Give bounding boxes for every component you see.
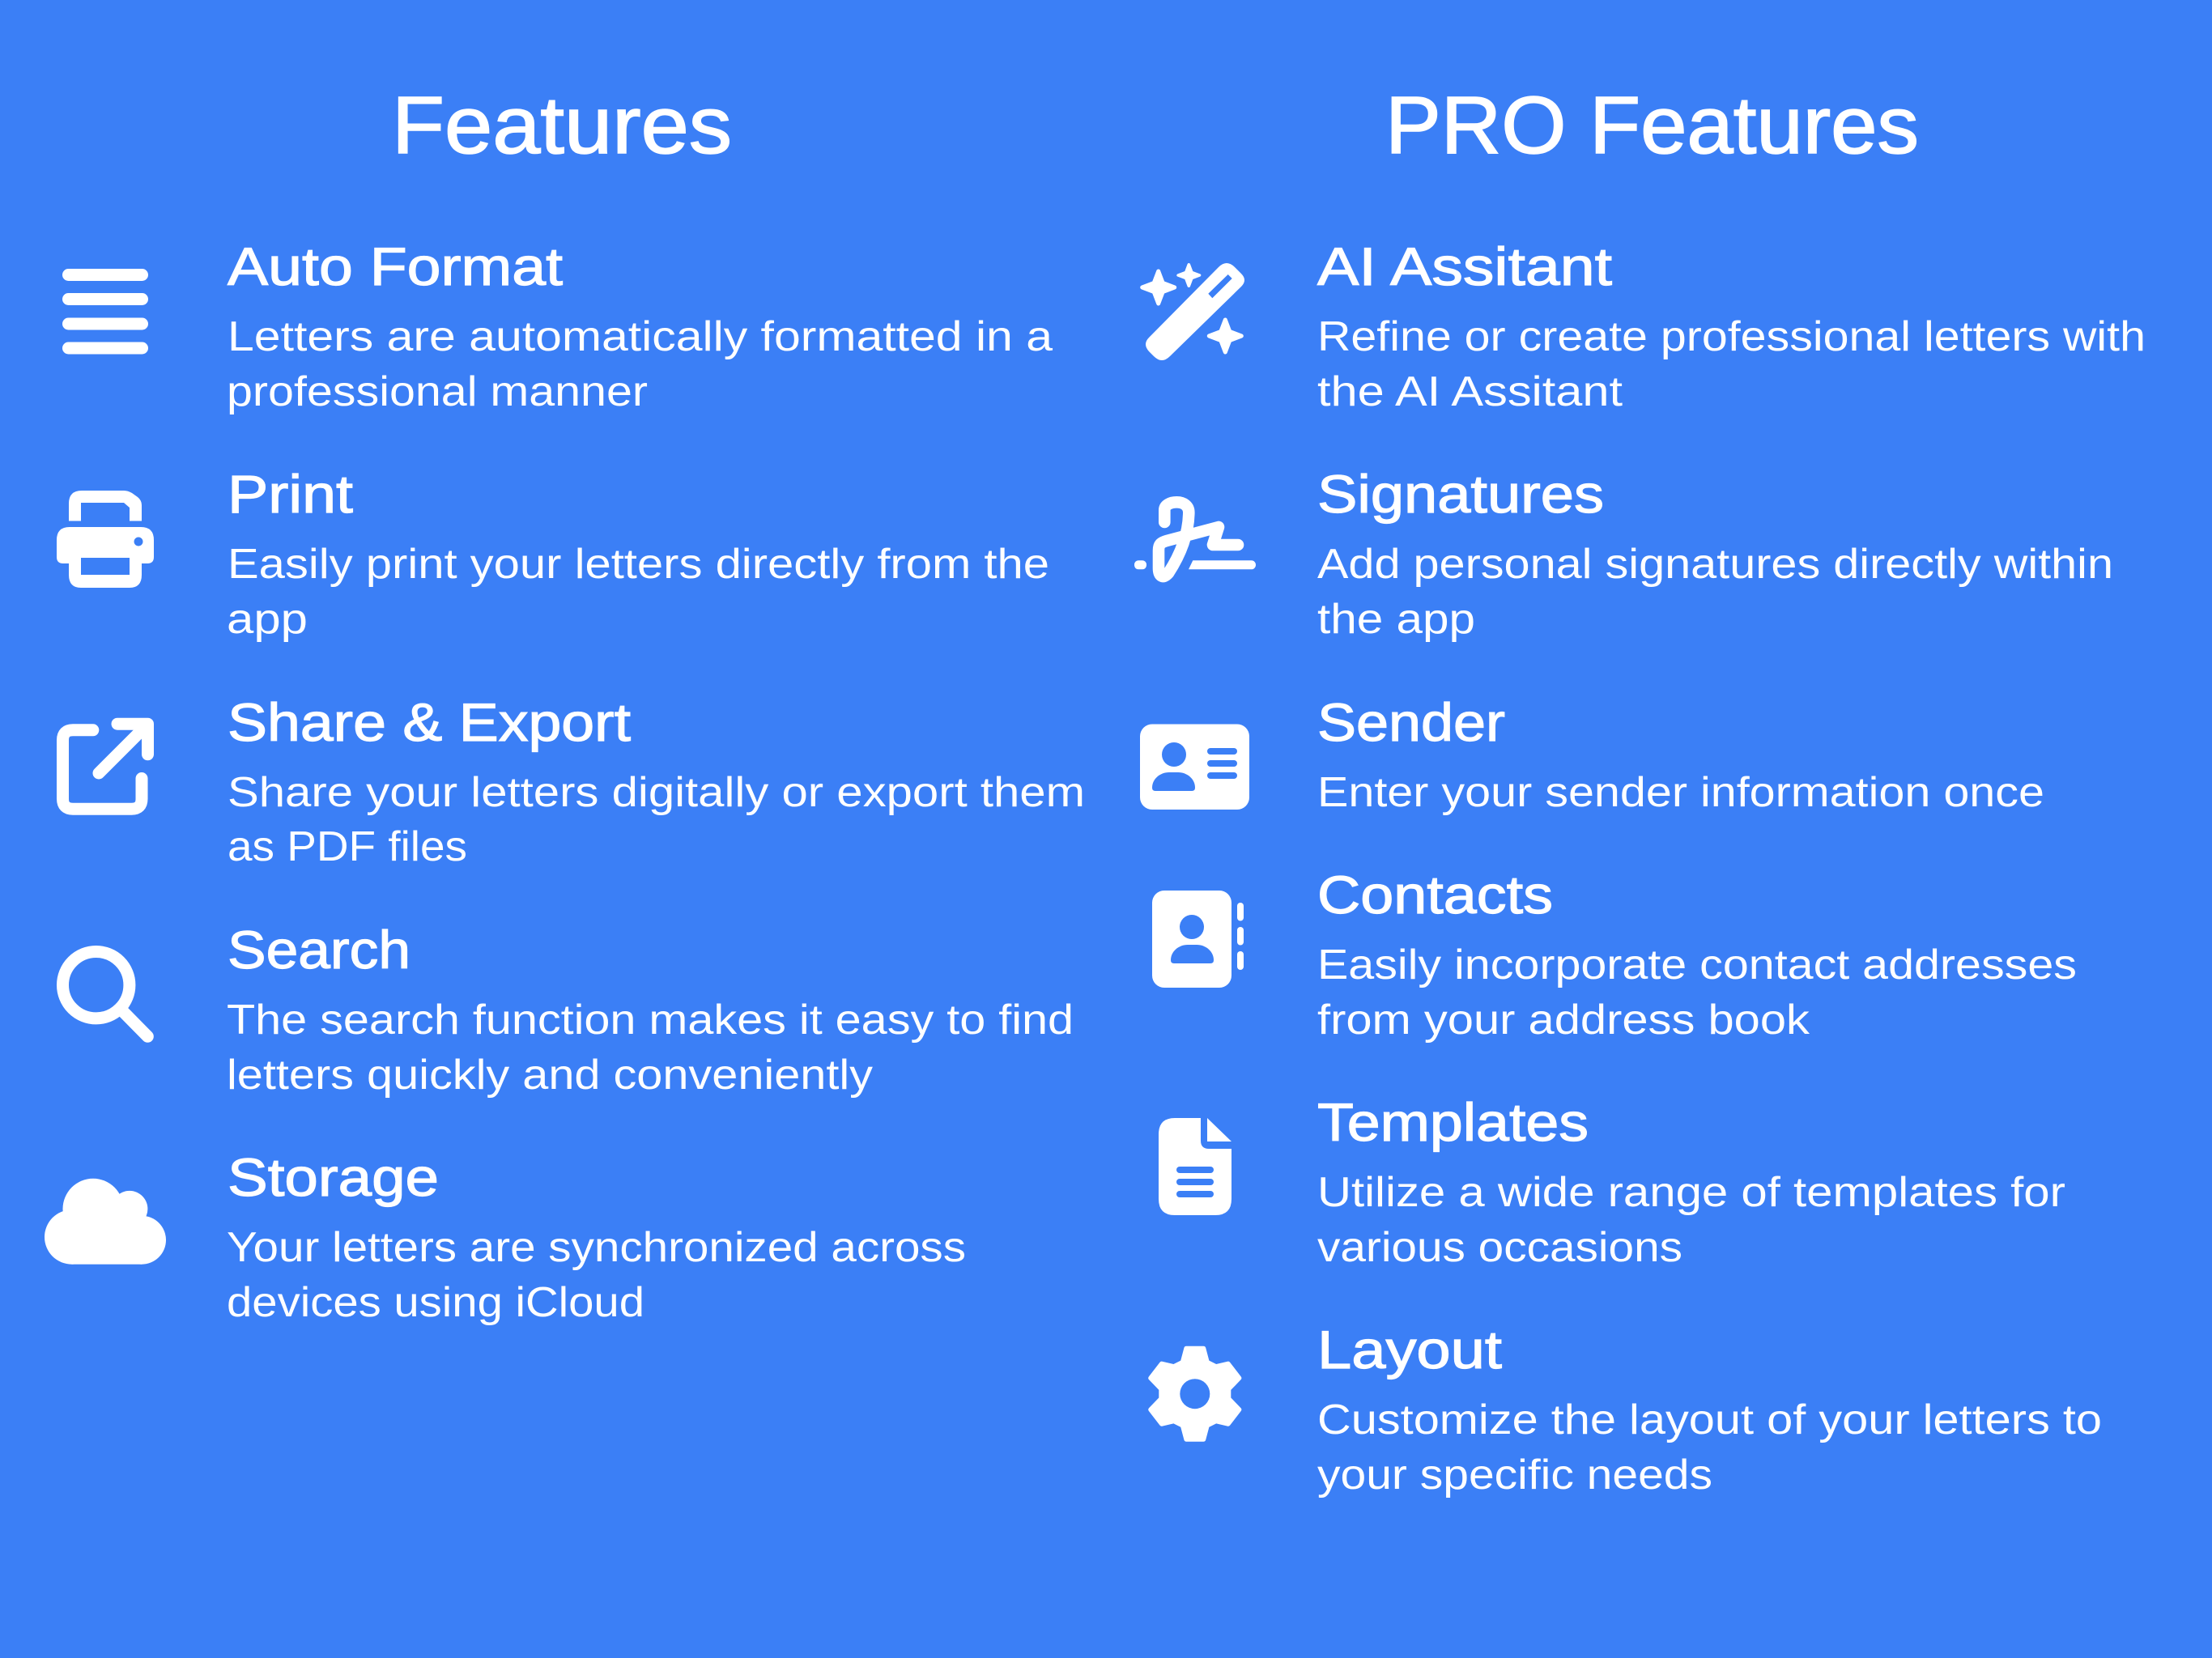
title: Templates: Templates <box>1317 1092 1589 1152</box>
feature: Share & Export <box>63 692 1085 870</box>
description: Auto Format: Letters are automatically formatted in a <box>228 313 1053 360</box>
icon: contact card <box>1140 724 1249 810</box>
description: AI Assitant <box>1317 313 2146 415</box>
icon: printer <box>57 491 154 588</box>
description: Storage: devices using iCloud <box>227 1279 644 1326</box>
description: Print: app <box>227 596 308 643</box>
heading: Features: Features <box>392 80 732 171</box>
icon: magic wand <box>1142 263 1244 360</box>
feature: Layout <box>1151 1320 2102 1499</box>
icon: address book <box>1152 891 1244 988</box>
title: Print: Print <box>228 464 353 524</box>
title: Sender: Sender <box>1317 692 1505 752</box>
description: Contacts: from your address book <box>1317 997 1810 1044</box>
heading: PRO Features: PRO Features <box>1385 80 1919 171</box>
feature: Storage <box>45 1147 966 1326</box>
icon: signature <box>1134 502 1256 576</box>
description: Layout: your specific needs <box>1317 1452 1712 1499</box>
description: Auto Format <box>227 313 1053 415</box>
feature: Search <box>63 920 1074 1099</box>
description: Search <box>227 997 1074 1099</box>
title: Contacts: Contacts <box>1317 865 1553 925</box>
description: Signatures <box>1317 541 2113 643</box>
description: Layout <box>1317 1397 2102 1499</box>
icon: gear <box>1151 1349 1239 1439</box>
title: Share & Export: Share & Export <box>228 692 631 752</box>
description: Print: Easily print your letters directly from the <box>228 541 1049 588</box>
icon: document <box>1159 1118 1231 1215</box>
feature: AI Assitant <box>1142 236 2146 415</box>
feature: Templates <box>1159 1092 2065 1271</box>
panel: PRO features <box>1134 80 2146 1499</box>
description: Layout: Customize the layout of your letters to <box>1317 1397 2102 1443</box>
title: Search: Search <box>228 920 410 980</box>
description: Templates <box>1317 1169 2065 1271</box>
description: AI Assitant: the AI Assitant <box>1317 368 1623 415</box>
description: Auto Format: professional manner <box>227 368 648 415</box>
feature: Sender <box>1140 692 2044 816</box>
panel: features <box>45 80 1085 1326</box>
feature: Auto Format <box>62 236 1053 415</box>
title: Layout: Layout <box>1317 1320 1502 1380</box>
description: Print <box>227 541 1049 643</box>
description: Sender: Enter your sender information once <box>1317 769 2044 816</box>
icon: text lines <box>62 269 148 355</box>
description: Signatures: Add personal signatures directly within <box>1317 541 2113 588</box>
title: AI Assitant: AI Assitant <box>1317 236 1612 296</box>
icon: magnifier <box>63 952 147 1036</box>
title: Storage: Storage <box>228 1147 439 1207</box>
title: Auto Format: Auto Format <box>228 236 563 296</box>
description: Storage: Your letters are synchronized across <box>227 1224 966 1271</box>
description: Contacts <box>1317 942 2077 1044</box>
feature: Contacts <box>1152 865 2077 1044</box>
icon: cloud <box>45 1179 166 1265</box>
description: Templates: various occasions <box>1317 1224 1682 1271</box>
description: Signatures: the app <box>1317 596 1475 643</box>
description: Search: letters quickly and conveniently <box>227 1052 873 1099</box>
description: Search: The search function makes it easy to find <box>227 997 1074 1044</box>
feature: Print <box>57 464 1049 643</box>
description: Share & Export: Share your letters digitally or export them <box>228 769 1085 816</box>
description: Share & Export <box>228 769 1085 870</box>
description: Storage <box>227 1224 966 1326</box>
description: AI Assitant: Refine or create professional letters with <box>1317 313 2146 360</box>
title: Signatures: Signatures <box>1317 464 1604 524</box>
feature: Signatures <box>1134 464 2113 643</box>
description: Templates: Utilize a wide range of templates for <box>1317 1169 2065 1216</box>
description: Share & Export: as PDF files <box>228 823 467 870</box>
icon: share arrow <box>63 724 147 809</box>
description: Contacts: Easily incorporate contact addresses <box>1317 942 2077 988</box>
